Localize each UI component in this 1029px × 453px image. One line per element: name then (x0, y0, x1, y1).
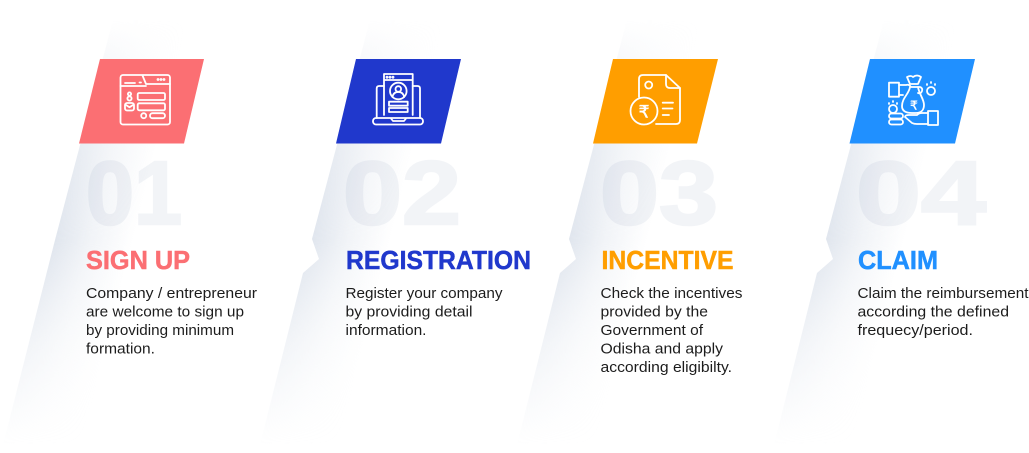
description: incentive: Government of (600, 322, 704, 339)
icon: hands with money bag and coins (889, 76, 938, 125)
icon: document with rupee coin (630, 75, 680, 124)
background shadow shape 1 (20, 144, 126, 382)
description: claim: according the defined (858, 304, 1009, 320)
heading: registration: REGISTRATION (346, 245, 531, 275)
card: step 1 sign up (20, 59, 257, 382)
description: registration (346, 285, 503, 339)
description: sign up: formation. (86, 340, 155, 358)
description: incentive: provided by the (600, 304, 708, 320)
card: step 2 registration (276, 59, 530, 384)
icon: rupee sign on bag: ₹ (910, 98, 918, 112)
sky blue parallelogram (850, 59, 975, 144)
background shadow shape 3 (533, 144, 639, 382)
step number 03: 03 (600, 144, 718, 244)
heading: claim: CLAIM (858, 245, 938, 275)
description: claim: Claim the reimbursement (858, 285, 1029, 302)
description: incentive: according eligibilty. (600, 359, 732, 376)
description: claim: frequecy/period. (858, 322, 973, 339)
heading: incentive: INCENTIVE (602, 245, 734, 275)
step number 01: 01 (86, 144, 182, 244)
description: incentive (600, 285, 742, 376)
infographic: four-step process (20, 59, 1028, 384)
description: incentive: Odisha and apply (600, 340, 724, 358)
description: sign up: Company / entrepreneur (86, 285, 257, 302)
description: incentive: Check the incentives (600, 285, 742, 302)
background shadow shape 4 (790, 144, 898, 382)
card: step 3 incentive (533, 59, 742, 382)
description: sign up: by providing minimum (86, 322, 234, 339)
step number 02: 02 (343, 144, 461, 244)
blue parallelogram (336, 59, 461, 144)
description: sign up: are welcome to sign up (86, 304, 244, 320)
step number 04: 04 (856, 144, 986, 244)
orange parallelogram (593, 59, 718, 144)
description: claim (858, 285, 1029, 339)
icon: sign up form window (120, 75, 170, 124)
icon: laptop with profile (373, 74, 423, 124)
heading: sign up: SIGN UP (86, 245, 190, 275)
description: registration: information. (346, 322, 426, 339)
description: registration: Register your company (346, 285, 503, 302)
description: sign up (86, 285, 257, 358)
background shadow shape 2 (276, 144, 382, 384)
description: registration: by providing detail (346, 304, 472, 320)
card: step 4 claim (790, 59, 1028, 382)
coral parallelogram (79, 59, 204, 144)
icon: rupee sign: ₹ (639, 102, 649, 122)
